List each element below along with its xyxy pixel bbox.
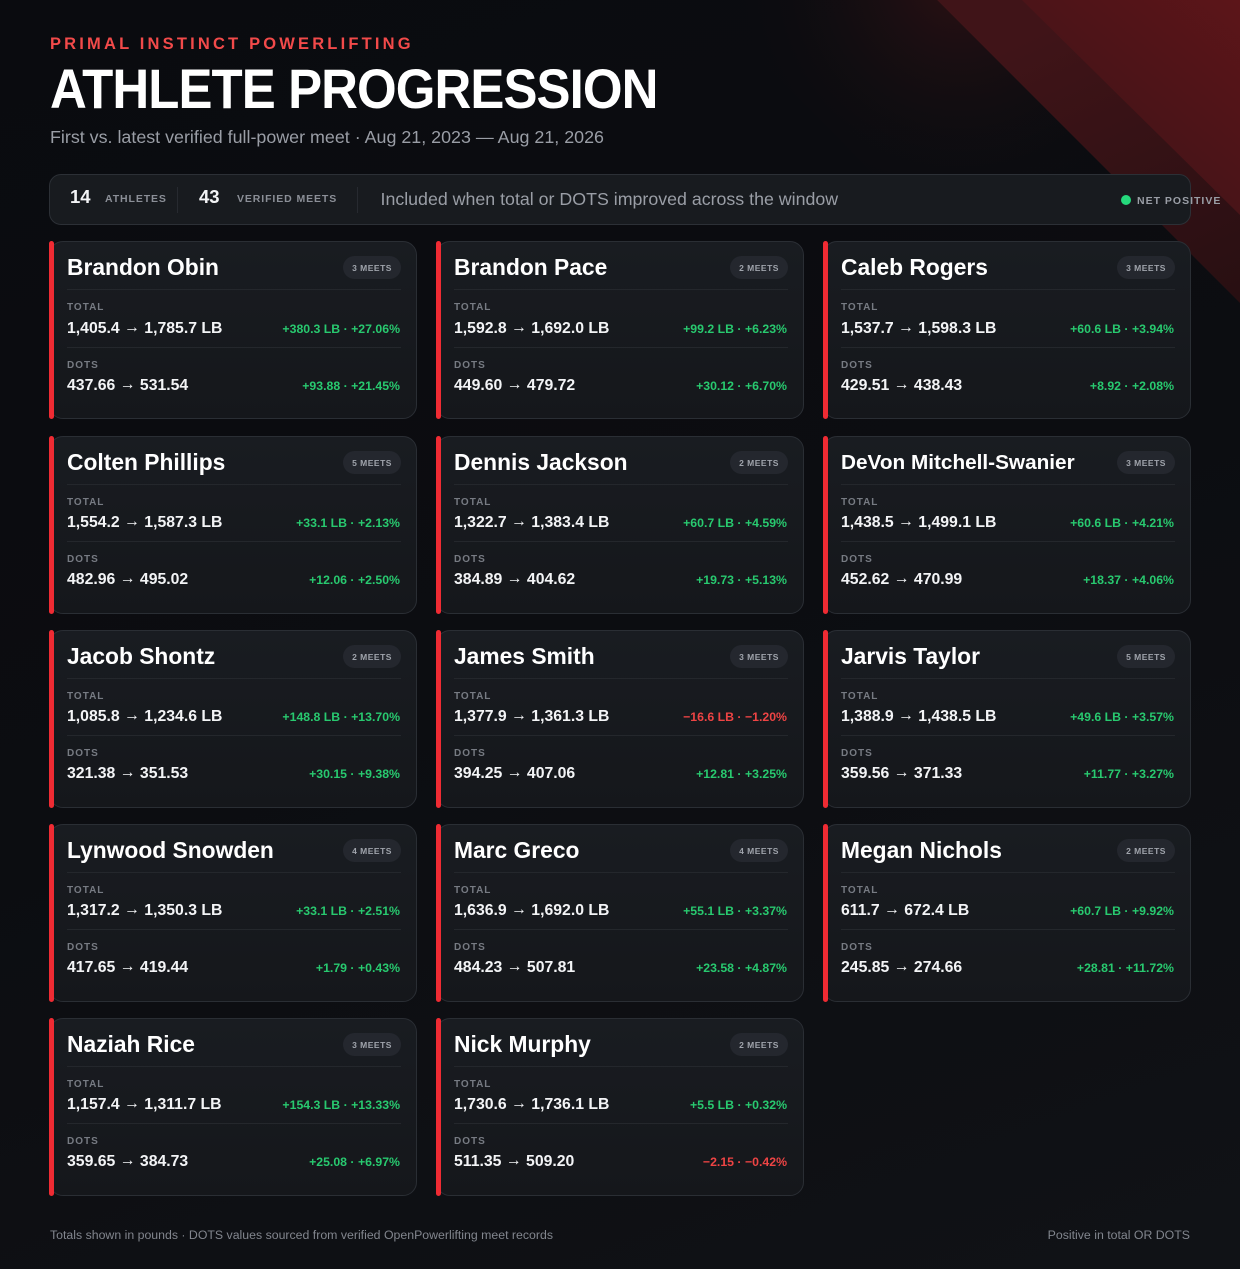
card: Naziah Rice: +25.08 · +6.97% bbox=[309, 1155, 400, 1169]
card: Jarvis Taylor: 1,388.9 → 1,438.5 LB bbox=[841, 707, 996, 725]
card: Marc Greco: 484.23 → 507.81 bbox=[454, 958, 575, 976]
card: Dennis Jackson: 1,322.7 → 1,383.4 LB bbox=[454, 513, 609, 531]
stat: verified meets bbox=[199, 186, 337, 207]
card: Nick Murphy: −2.15 · −0.42% bbox=[703, 1155, 787, 1169]
card: DeVon Mitchell-Swanier: DeVon Mitchell-Swanier bbox=[841, 451, 1075, 474]
card: Dennis Jackson: TOTAL bbox=[454, 497, 491, 508]
card: Brandon Obin: +93.88 · +21.45% bbox=[302, 379, 400, 393]
card: Lynwood Snowden: Lynwood Snowden bbox=[67, 837, 274, 863]
summary bar bbox=[49, 174, 1191, 225]
card: Jacob Shontz: +148.8 LB · +13.70% bbox=[282, 710, 400, 724]
card: Jacob Shontz bbox=[49, 630, 417, 808]
summary note: Included when total or DOTS improved across the window bbox=[380, 189, 838, 209]
title: ATHLETE PROGRESSION bbox=[50, 57, 657, 120]
card: Colten Phillips: Colten Phillips bbox=[67, 449, 225, 475]
card: Nick Murphy: 1,730.6 → 1,736.1 LB bbox=[454, 1095, 609, 1113]
card: Brandon Pace: +99.2 LB · +6.23% bbox=[683, 322, 787, 336]
card: Caleb Rogers: 429.51 → 438.43 bbox=[841, 376, 962, 394]
card: James Smith: 1,377.9 → 1,361.3 LB bbox=[454, 707, 609, 725]
card: Dennis Jackson bbox=[436, 436, 804, 614]
card: James Smith: DOTS bbox=[454, 748, 486, 759]
card: Lynwood Snowden: 417.65 → 419.44 bbox=[67, 958, 188, 976]
card: Colten Phillips: 5 MEETS bbox=[352, 458, 392, 468]
card: Jarvis Taylor: +49.6 LB · +3.57% bbox=[1070, 710, 1174, 724]
card: Brandon Pace: 1,592.8 → 1,692.0 LB bbox=[454, 319, 609, 337]
card: Naziah Rice bbox=[49, 1018, 417, 1196]
card: Nick Murphy: Nick Murphy bbox=[454, 1031, 591, 1057]
card: Dennis Jackson: Dennis Jackson bbox=[454, 449, 628, 475]
subtitle: First vs. latest verified full-power meet · Aug 21, 2023 — Aug 21, 2026 bbox=[50, 127, 604, 147]
card: Colten Phillips: +12.06 · +2.50% bbox=[309, 573, 400, 587]
card: DeVon Mitchell-Swanier: +18.37 · +4.06% bbox=[1083, 573, 1174, 587]
card: Naziah Rice: Naziah Rice bbox=[67, 1031, 195, 1057]
card: Lynwood Snowden: TOTAL bbox=[67, 885, 104, 896]
card: Marc Greco: TOTAL bbox=[454, 885, 491, 896]
card: Jacob Shontz: 2 MEETS bbox=[352, 652, 392, 662]
card: James Smith bbox=[436, 630, 804, 808]
card: Marc Greco: +23.58 · +4.87% bbox=[696, 961, 787, 975]
card: Brandon Pace: +30.12 · +6.70% bbox=[696, 379, 787, 393]
card: Megan Nichols: +28.81 · +11.72% bbox=[1077, 961, 1174, 975]
card: Brandon Obin: TOTAL bbox=[67, 302, 104, 313]
card: Brandon Pace: TOTAL bbox=[454, 302, 491, 313]
card: Lynwood Snowden: 4 MEETS bbox=[352, 846, 392, 856]
card: Caleb Rogers bbox=[823, 241, 1191, 419]
card: Brandon Pace bbox=[436, 241, 804, 419]
header eyebrow: PRIMAL INSTINCT POWERLIFTING bbox=[50, 35, 414, 53]
stat: athletes bbox=[70, 186, 167, 207]
card: DeVon Mitchell-Swanier: +60.6 LB · +4.21% bbox=[1070, 516, 1174, 530]
card: Megan Nichols bbox=[823, 824, 1191, 1002]
card: Lynwood Snowden: DOTS bbox=[67, 942, 99, 953]
stat: athletes: ATHLETES bbox=[105, 193, 167, 205]
card: Naziah Rice: 359.65 → 384.73 bbox=[67, 1152, 188, 1170]
card: Brandon Obin: 437.66 → 531.54 bbox=[67, 376, 188, 394]
card: Brandon Obin: 3 MEETS bbox=[352, 263, 392, 273]
card: Naziah Rice: TOTAL bbox=[67, 1079, 104, 1090]
card: Caleb Rogers: +60.6 LB · +3.94% bbox=[1070, 322, 1174, 336]
card: Dennis Jackson: 2 MEETS bbox=[739, 458, 779, 468]
card: Colten Phillips: TOTAL bbox=[67, 497, 104, 508]
card: Jacob Shontz: +30.15 · +9.38% bbox=[309, 767, 400, 781]
card: James Smith: +12.81 · +3.25% bbox=[696, 767, 787, 781]
card: DeVon Mitchell-Swanier: DOTS bbox=[841, 554, 873, 565]
card: James Smith: −16.6 LB · −1.20% bbox=[683, 710, 787, 724]
card: Dennis Jackson: +60.7 LB · +4.59% bbox=[683, 516, 787, 530]
card: Naziah Rice: DOTS bbox=[67, 1136, 99, 1147]
card: Lynwood Snowden: +1.79 · +0.43% bbox=[316, 961, 400, 975]
card: Jacob Shontz: 1,085.8 → 1,234.6 LB bbox=[67, 707, 222, 725]
card: Naziah Rice: +154.3 LB · +13.33% bbox=[282, 1098, 400, 1112]
card: Naziah Rice: 3 MEETS bbox=[352, 1040, 392, 1050]
card: Marc Greco: 1,636.9 → 1,692.0 LB bbox=[454, 901, 609, 919]
card: Brandon Obin: DOTS bbox=[67, 360, 99, 371]
card: Megan Nichols: 245.85 → 274.66 bbox=[841, 958, 962, 976]
card: Brandon Obin: 1,405.4 → 1,785.7 LB bbox=[67, 319, 222, 337]
card: Jarvis Taylor: Jarvis Taylor bbox=[841, 643, 980, 669]
card: DeVon Mitchell-Swanier: 452.62 → 470.99 bbox=[841, 570, 962, 588]
card: Caleb Rogers: TOTAL bbox=[841, 302, 878, 313]
card: James Smith: James Smith bbox=[454, 643, 595, 669]
card: Naziah Rice: 1,157.4 → 1,311.7 LB bbox=[67, 1095, 222, 1113]
card: Megan Nichols: Megan Nichols bbox=[841, 837, 1002, 863]
card: Jarvis Taylor: TOTAL bbox=[841, 691, 878, 702]
card: Marc Greco: +55.1 LB · +3.37% bbox=[683, 904, 787, 918]
card: Nick Murphy bbox=[436, 1018, 804, 1196]
card: Caleb Rogers: +8.92 · +2.08% bbox=[1090, 379, 1174, 393]
card: Jarvis Taylor bbox=[823, 630, 1191, 808]
card: Lynwood Snowden bbox=[49, 824, 417, 1002]
card: Megan Nichols: 611.7 → 672.4 LB bbox=[841, 901, 969, 919]
card: DeVon Mitchell-Swanier: TOTAL bbox=[841, 497, 878, 508]
card: James Smith: 394.25 → 407.06 bbox=[454, 764, 575, 782]
card: Brandon Obin bbox=[49, 241, 417, 419]
card: Brandon Pace: 449.60 → 479.72 bbox=[454, 376, 575, 394]
card: Colten Phillips: +33.1 LB · +2.13% bbox=[296, 516, 400, 530]
card: Marc Greco: 4 MEETS bbox=[739, 846, 779, 856]
card: Jarvis Taylor: 359.56 → 371.33 bbox=[841, 764, 962, 782]
card: Dennis Jackson: +19.73 · +5.13% bbox=[696, 573, 787, 587]
card: DeVon Mitchell-Swanier: 1,438.5 → 1,499.1 LB bbox=[841, 513, 996, 531]
card: Jacob Shontz: DOTS bbox=[67, 748, 99, 759]
card: Nick Murphy: 511.35 → 509.20 bbox=[454, 1152, 574, 1170]
card: Marc Greco: DOTS bbox=[454, 942, 486, 953]
card: Lynwood Snowden: +33.1 LB · +2.51% bbox=[296, 904, 400, 918]
card: Brandon Pace: DOTS bbox=[454, 360, 486, 371]
card: Jarvis Taylor: +11.77 · +3.27% bbox=[1084, 767, 1174, 781]
card: Dennis Jackson: 384.89 → 404.62 bbox=[454, 570, 575, 588]
card: Colten Phillips bbox=[49, 436, 417, 614]
card: Lynwood Snowden: 1,317.2 → 1,350.3 LB bbox=[67, 901, 222, 919]
card: Colten Phillips: 482.96 → 495.02 bbox=[67, 570, 188, 588]
card: Brandon Pace: Brandon Pace bbox=[454, 254, 607, 280]
card: Caleb Rogers: DOTS bbox=[841, 360, 873, 371]
card: Megan Nichols: TOTAL bbox=[841, 885, 878, 896]
card: Nick Murphy: +5.5 LB · +0.32% bbox=[690, 1098, 787, 1112]
card: Megan Nichols: DOTS bbox=[841, 942, 873, 953]
card: DeVon Mitchell-Swanier bbox=[823, 436, 1191, 614]
card: Nick Murphy: 2 MEETS bbox=[739, 1040, 779, 1050]
card: Megan Nichols: +60.7 LB · +9.92% bbox=[1070, 904, 1174, 918]
card: Nick Murphy: TOTAL bbox=[454, 1079, 491, 1090]
card: James Smith: TOTAL bbox=[454, 691, 491, 702]
card: Caleb Rogers: 3 MEETS bbox=[1126, 263, 1166, 273]
card: Megan Nichols: 2 MEETS bbox=[1126, 846, 1166, 856]
legend: net positive: NET POSITIVE bbox=[1137, 195, 1221, 207]
card: Marc Greco bbox=[436, 824, 804, 1002]
card: Jacob Shontz: 321.38 → 351.53 bbox=[67, 764, 188, 782]
card: James Smith: 3 MEETS bbox=[739, 652, 779, 662]
card: Nick Murphy: DOTS bbox=[454, 1136, 486, 1147]
card: Colten Phillips: 1,554.2 → 1,587.3 LB bbox=[67, 513, 222, 531]
card: DeVon Mitchell-Swanier: 3 MEETS bbox=[1126, 458, 1166, 468]
card: Colten Phillips: DOTS bbox=[67, 554, 99, 565]
stat: verified meets: VERIFIED MEETS bbox=[237, 193, 337, 205]
card: Marc Greco: Marc Greco bbox=[454, 837, 579, 863]
card: Jacob Shontz: TOTAL bbox=[67, 691, 104, 702]
card: Jarvis Taylor: 5 MEETS bbox=[1126, 652, 1166, 662]
card: Jarvis Taylor: DOTS bbox=[841, 748, 873, 759]
card: Jacob Shontz: Jacob Shontz bbox=[67, 643, 215, 669]
card: Brandon Obin: Brandon Obin bbox=[67, 254, 219, 280]
card: Brandon Obin: +380.3 LB · +27.06% bbox=[282, 322, 400, 336]
stat: verified meets: 43 bbox=[199, 186, 220, 207]
stat: athletes: 14 bbox=[70, 186, 91, 207]
footer note right: Positive in total OR DOTS bbox=[1048, 1228, 1190, 1242]
card: Brandon Pace: 2 MEETS bbox=[739, 263, 779, 273]
card: Dennis Jackson: DOTS bbox=[454, 554, 486, 565]
card: Caleb Rogers: Caleb Rogers bbox=[841, 254, 988, 280]
footer note left: Totals shown in pounds · DOTS values sourced from verified OpenPowerlifting meet records bbox=[50, 1228, 553, 1242]
card: Caleb Rogers: 1,537.7 → 1,598.3 LB bbox=[841, 319, 996, 337]
